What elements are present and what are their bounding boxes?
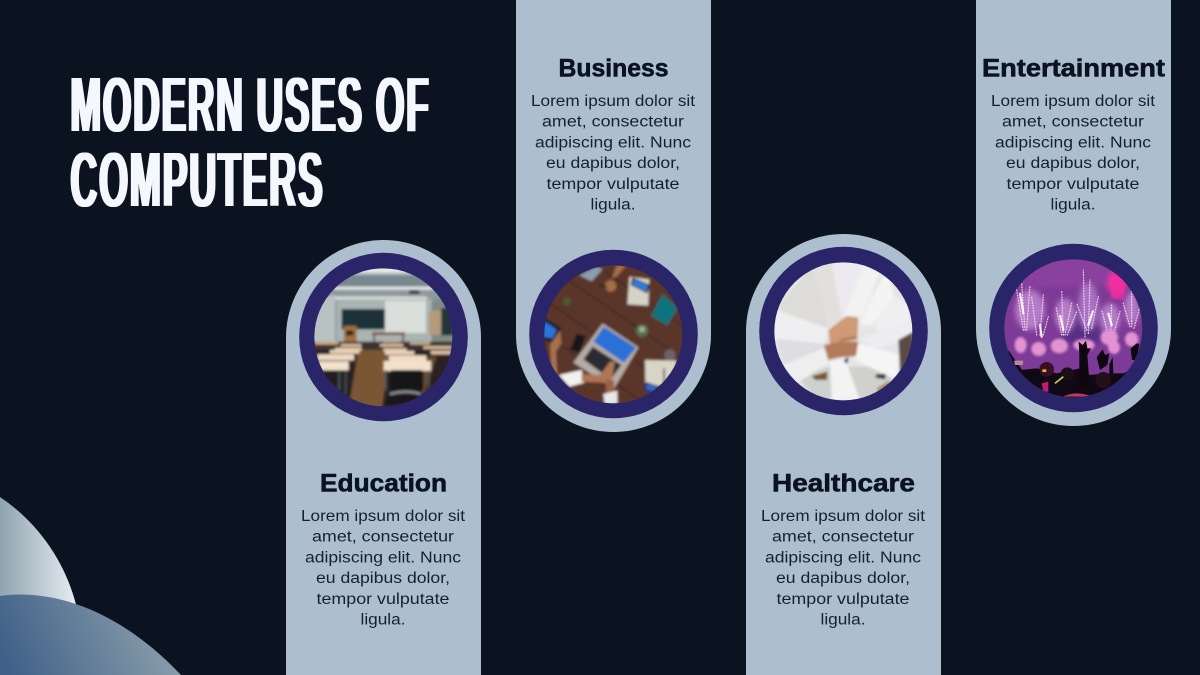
ring: business: [529, 250, 698, 418]
text: healthcare description: [761, 508, 926, 628]
text: entertainment description: Lorem ipsum dolor sit: [991, 93, 1156, 110]
text: education description: ligula.: [360, 612, 406, 628]
panel: entertainment: [976, 0, 1171, 426]
text: entertainment description: eu dapibus dolor,: [1006, 155, 1140, 172]
text: education description: [301, 508, 466, 628]
ring: entertainment: [989, 244, 1158, 412]
heading: entertainment: Entertainment: [982, 55, 1166, 83]
decorative corner circles: [0, 497, 181, 675]
text: education description: Lorem ipsum dolor sit: [301, 508, 466, 525]
text: business description: Lorem ipsum dolor sit: [531, 93, 696, 110]
text: education description: adipiscing elit. Nunc: [305, 549, 461, 566]
ring: healthcare: [759, 247, 928, 415]
photo: classroom: [310, 267, 457, 410]
panel: healthcare: [746, 234, 941, 675]
text: entertainment description: tempor vulputate: [1006, 176, 1140, 193]
text: healthcare description: ligula.: [820, 612, 866, 628]
infographic canvas: MODERN USES OF: [70, 60, 430, 149]
heading: education: Education: [320, 470, 447, 498]
text: business description: tempor vulputate: [546, 176, 680, 193]
title: COMPUTERS: [70, 135, 324, 224]
title: [70, 60, 430, 224]
heading: business: Business: [558, 55, 668, 83]
text: healthcare description: tempor vulputate: [776, 591, 910, 608]
text: business description: amet, consectetur: [542, 114, 684, 131]
text: healthcare description: Lorem ipsum dolor sit: [761, 508, 926, 525]
text: education description: amet, consectetur: [312, 529, 454, 546]
text: business description: eu dapibus dolor,: [546, 155, 680, 172]
text: entertainment description: adipiscing elit. Nunc: [995, 134, 1151, 151]
text: business description: ligula.: [590, 196, 636, 214]
text: entertainment description: amet, consectetur: [1002, 114, 1144, 131]
heading: healthcare: Healthcare: [772, 470, 915, 498]
text: business description: adipiscing elit. Nunc: [535, 134, 691, 151]
photo: desk with laptop: [544, 265, 682, 404]
ring: education: [299, 253, 468, 421]
panel: education: [286, 240, 481, 675]
panel: business: [516, 0, 711, 432]
text: healthcare description: amet, consectetur: [772, 529, 914, 546]
text: entertainment description: ligula.: [1050, 196, 1096, 214]
text: education description: eu dapibus dolor,: [316, 570, 450, 587]
photo: concert: [1004, 259, 1142, 398]
text: education description: tempor vulputate: [316, 591, 450, 608]
text: healthcare description: eu dapibus dolor,: [776, 570, 910, 587]
text: business description: [531, 93, 696, 214]
photo: joined hands: [774, 262, 912, 400]
text: entertainment description: [991, 93, 1156, 214]
text: healthcare description: adipiscing elit. Nunc: [765, 549, 921, 566]
